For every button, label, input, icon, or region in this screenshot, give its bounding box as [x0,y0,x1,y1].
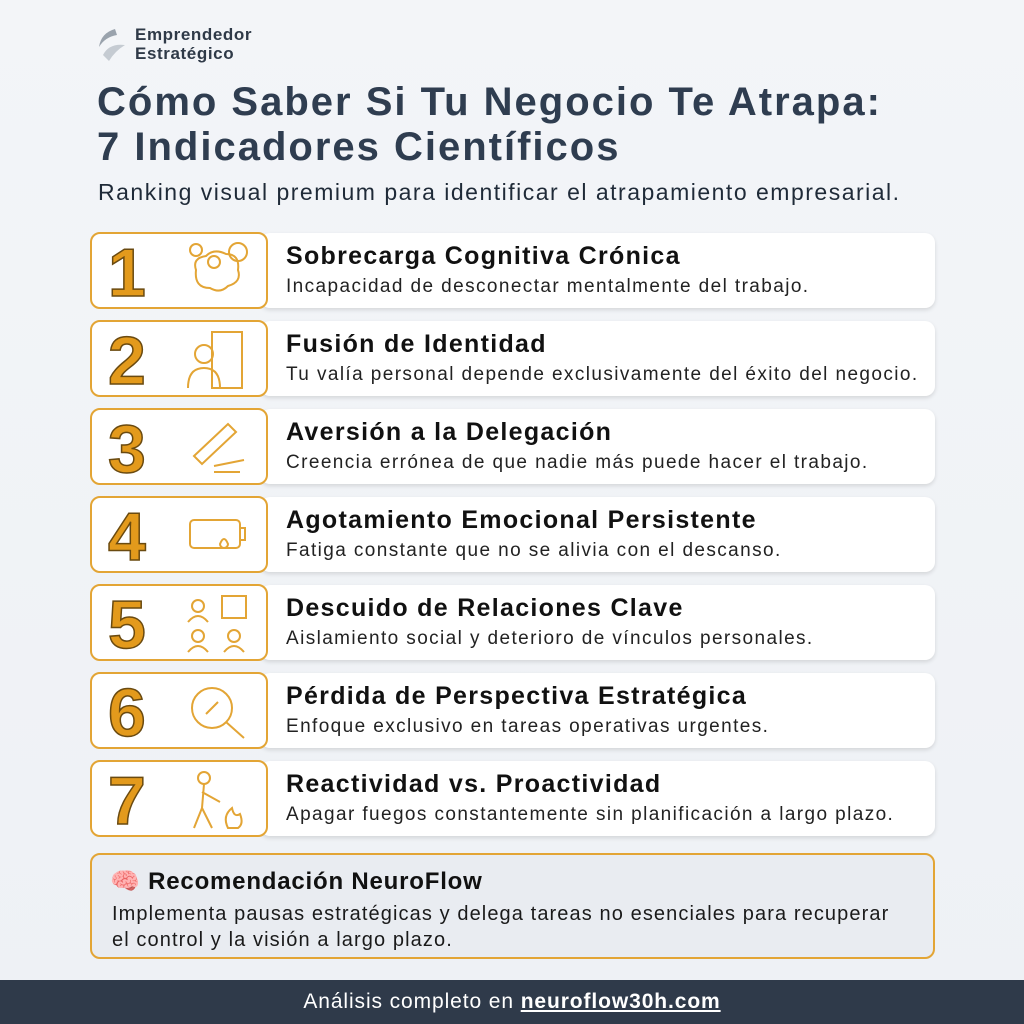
callout: recomendación: el control y la visión a largo plazo. [112,929,453,951]
footer: Análisis completo en neuroflow30h.com [303,990,721,1013]
row 1: Incapacidad de desconectar mentalmente del trabajo. [286,276,809,297]
row 2 [90,320,936,399]
row 5: 5 [108,587,146,663]
footer [0,980,1024,1024]
subtitle: Ranking visual premium para identificar el atrapamiento empresarial. [98,179,901,205]
callout: recomendación [90,853,935,959]
row 1: Sobrecarga Cognitiva Crónica [286,242,681,270]
row 1 [90,232,936,311]
row 3: Creencia errónea de que nadie más puede hacer el trabajo. [286,452,869,473]
row 6: 6 [108,675,146,751]
row 2: Tu valía personal depende exclusivamente del éxito del negocio. [286,364,919,385]
title: Cómo Saber Si Tu Negocio Te Atrapa: [97,80,882,124]
row 4: Agotamiento Emocional Persistente [286,506,757,534]
row 5: Aislamiento social y deterioro de vínculos personales. [286,628,814,649]
row 2: Fusión de Identidad [286,330,547,358]
row 4: 4 [108,499,146,575]
row 1: 1 [108,235,146,311]
row 5: Descuido de Relaciones Clave [286,594,684,622]
row 7 [90,760,936,839]
callout: recomendación: Implementa pausas estratégicas y delega tareas no esenciales para recuperar [112,903,889,925]
row 6: Pérdida de Perspectiva Estratégica [286,682,747,710]
row 3 [90,408,936,487]
logo [99,25,252,63]
title [97,80,882,169]
row 6: Enfoque exclusivo en tareas operativas urgentes. [286,716,769,737]
row 6 [90,672,936,751]
row 7: Reactividad vs. Proactividad [286,770,661,798]
logo: Estratégico [135,44,234,63]
row 5 [90,584,936,663]
row 3: Aversión a la Delegación [286,418,612,446]
row 7: Apagar fuegos constantemente sin planificación a largo plazo. [286,804,894,825]
row 4: Fatiga constante que no se alivia con el descanso. [286,540,782,561]
row 7: 7 [108,763,146,839]
title: 7 Indicadores Científicos [97,125,620,169]
callout: recomendación: 🧠 Recomendación NeuroFlow [110,868,483,895]
row 2: 2 [108,323,146,399]
row 3: 3 [108,411,146,487]
logo: Emprendedor [135,25,252,44]
row 4 [90,496,936,575]
